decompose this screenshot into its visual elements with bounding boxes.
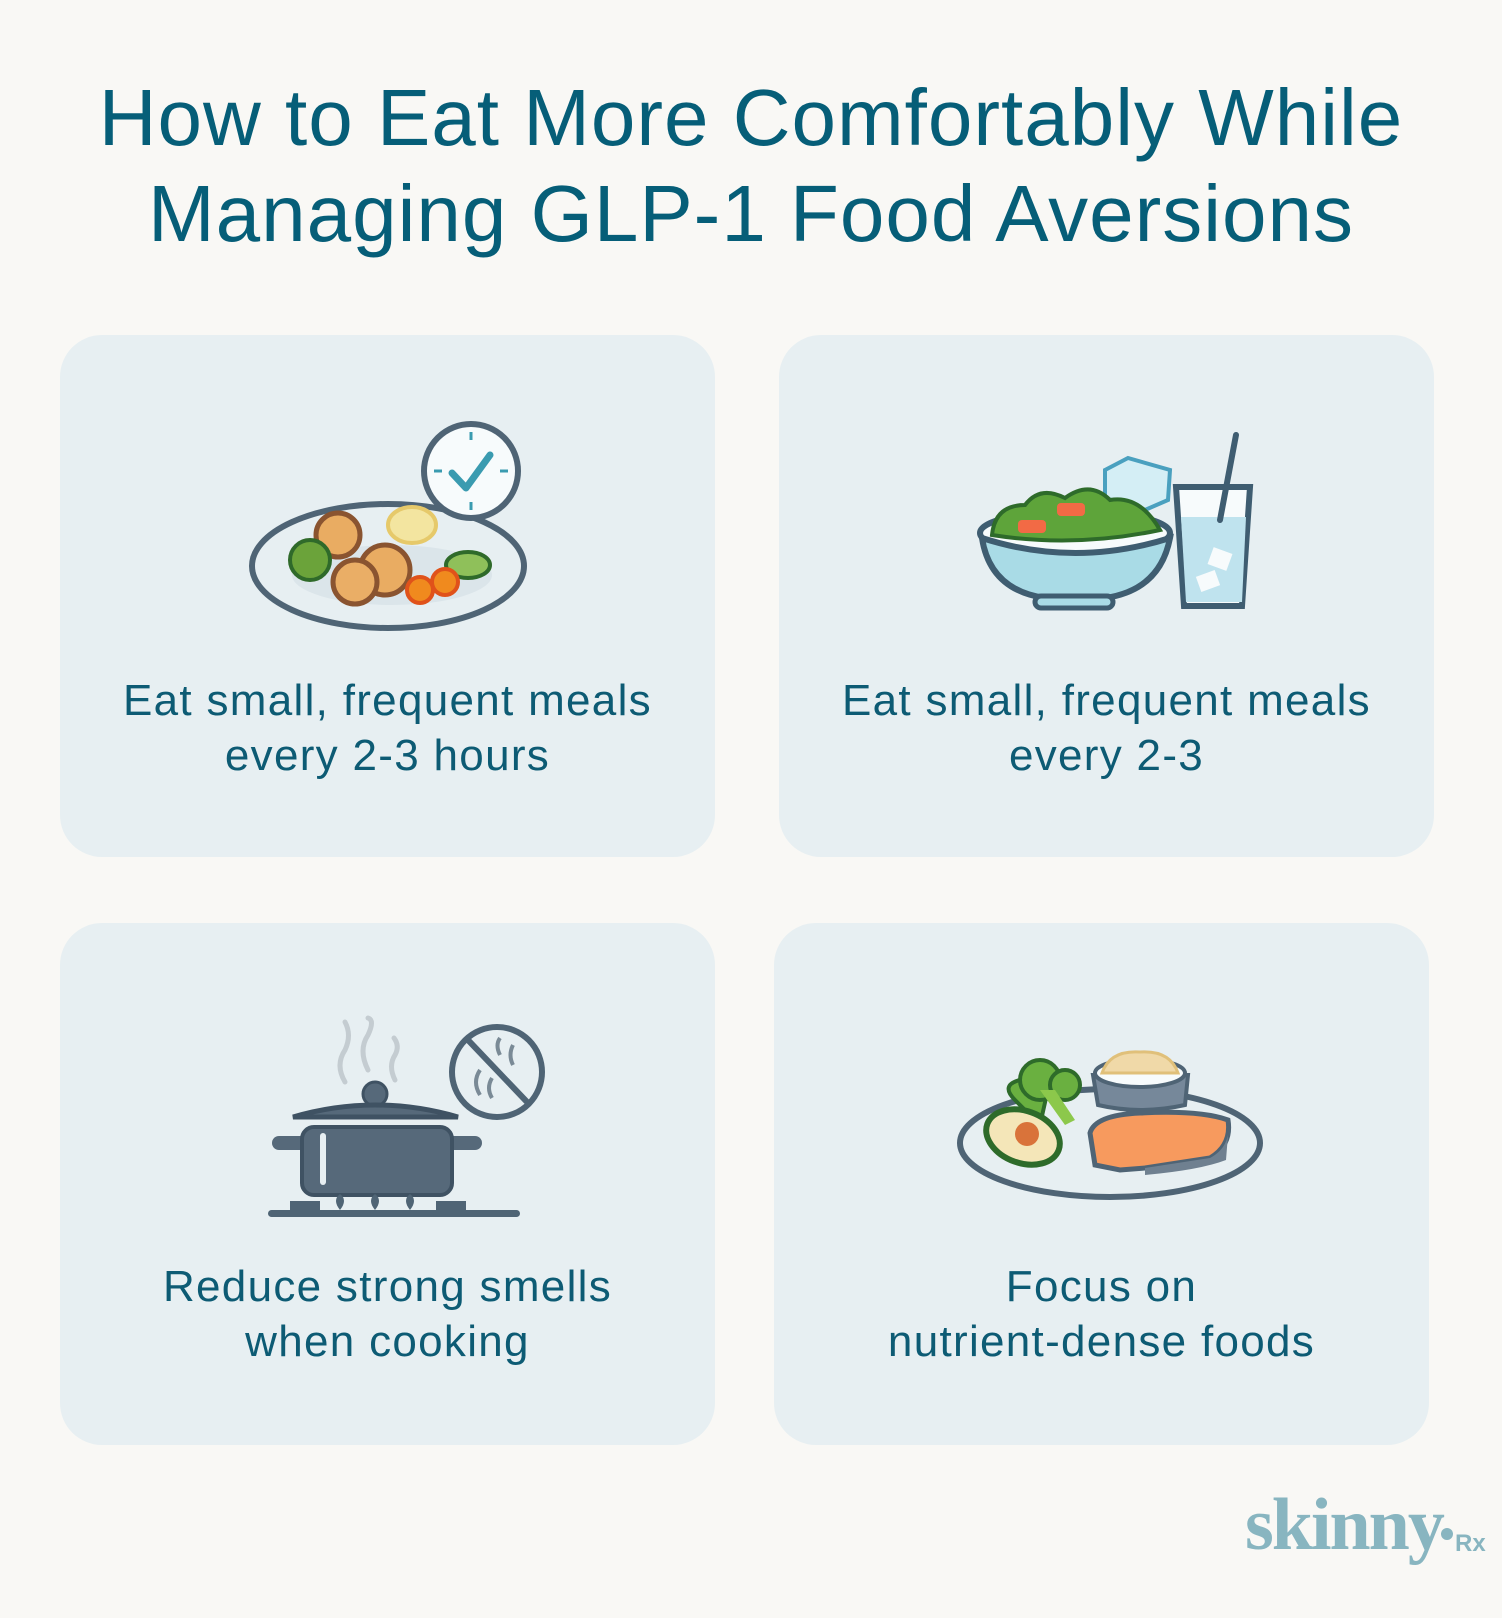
panel: salad and water — [779, 335, 1434, 857]
caption: Reduce strong smells — [163, 1262, 612, 1311]
title: How to Eat More Comfortably While — [99, 73, 1403, 162]
caption — [163, 1262, 612, 1366]
icon: plate with clock — [249, 421, 527, 631]
logo: skinny Rx: Rx — [1455, 1530, 1486, 1557]
caption — [123, 676, 652, 780]
panel: reduce smells — [60, 923, 715, 1445]
title — [99, 73, 1403, 258]
title: Managing GLP-1 Food Aversions — [148, 169, 1354, 258]
caption: nutrient-dense foods — [888, 1317, 1315, 1366]
panel: nutrient-dense foods — [774, 923, 1429, 1445]
caption: every 2-3 hours — [225, 731, 550, 780]
caption: Eat small, frequent meals — [123, 676, 652, 725]
caption — [842, 676, 1371, 780]
caption: Focus on — [1006, 1262, 1197, 1311]
icon: steaming pot with no-smell sign — [268, 1016, 545, 1217]
caption — [888, 1262, 1315, 1366]
icon: salad bowl and glass — [977, 432, 1254, 610]
caption: when cooking — [245, 1317, 530, 1366]
caption: every 2-3 — [1009, 731, 1204, 780]
panel: small frequent meals — [60, 335, 715, 857]
icon: plate with salmon, avocado, broccoli, rice — [957, 1050, 1263, 1200]
caption: Eat small, frequent meals — [842, 676, 1371, 725]
logo: skinny Rx: skinny — [1245, 1484, 1443, 1566]
